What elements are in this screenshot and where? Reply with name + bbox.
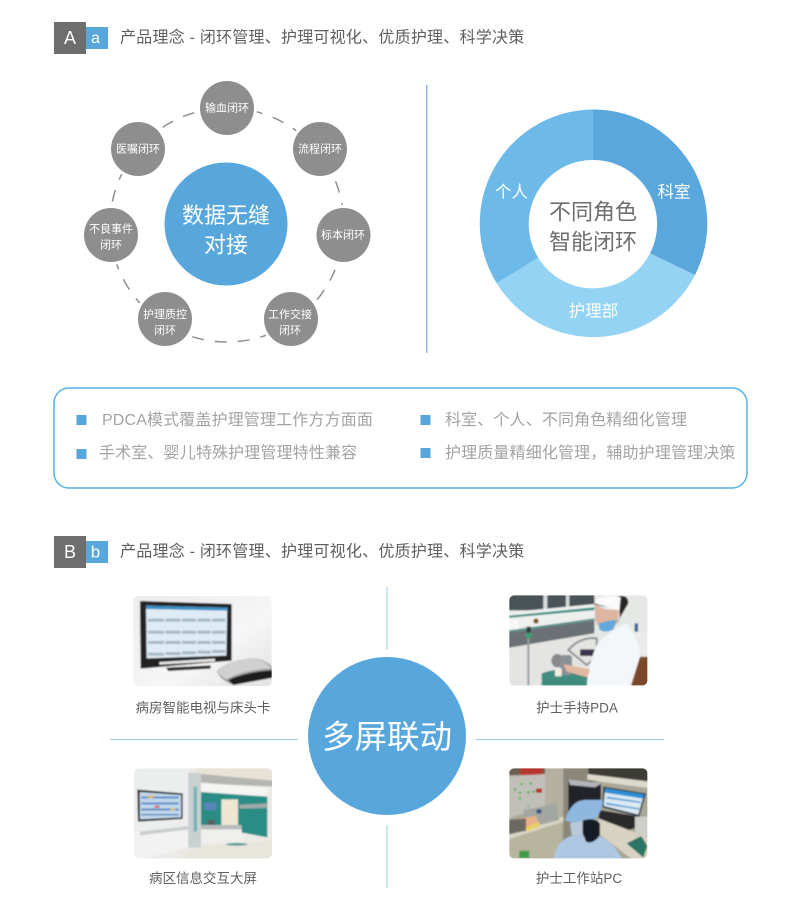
item 2: 手术室、婴儿特殊护理管理特性兼容: [99, 444, 357, 462]
node: 不良事件闭环: 不良事件: [89, 222, 133, 236]
section header B: [54, 536, 524, 568]
badge: A: a: [91, 30, 100, 47]
image: smart TV and bedside card: [134, 596, 272, 686]
node: 工作交接闭环: 闭环: [279, 324, 301, 337]
center circle: 多屏联动: 多屏联动: [322, 719, 452, 755]
caption: 护士工作站PC: 护士工作站PC: [536, 871, 622, 886]
image: ward display screen: [134, 768, 272, 858]
dashed ring: [110, 108, 344, 342]
caption: 病区信息交互大屏: 病区信息交互大屏: [149, 870, 257, 886]
image: nurse at PC workstation: [509, 768, 648, 858]
node: 流程闭环: 流程闭环: [298, 142, 342, 156]
vertical separator: [426, 85, 428, 353]
item 1: PDCA模式覆盖护理管理工作方方面面: [102, 411, 373, 429]
node: 护理质控闭环: [138, 292, 192, 346]
image: nurse with PDA: [509, 595, 648, 686]
caption: 护士手持PDA: 护士手持PDA: [536, 700, 618, 716]
node: 不良事件闭环: 闭环: [100, 238, 122, 252]
badge: A: A: [64, 28, 76, 48]
heading: section A: 产品理念 - 闭环管理、护理可视化、优质护理、科学决策: [120, 28, 524, 46]
donut center text: 不同角色: [549, 200, 637, 224]
slice: 科室: [593, 109, 707, 275]
badge: B: [54, 536, 108, 568]
node: 护理质控闭环: 护理质控: [143, 307, 187, 321]
node: 标本闭环: 标本闭环: [321, 228, 365, 242]
section header A: [54, 22, 524, 54]
label: 科室: 科室: [658, 182, 690, 202]
slice: 个人: [480, 110, 593, 283]
closed-loop cycle diagram: [84, 81, 370, 346]
center circle: 数据无缝: [182, 203, 270, 228]
slice: 护理部: [497, 253, 695, 337]
node: 医嘱闭环: 医嘱闭环: [116, 142, 160, 156]
donut center text: 智能闭环: [549, 230, 637, 254]
connector lines: [110, 587, 664, 888]
node: 流程闭环: [293, 122, 347, 176]
node: 标本闭环: [316, 208, 370, 262]
node: 工作交接闭环: 工作交接: [268, 307, 312, 321]
badge: A: [54, 22, 108, 54]
node: 输血闭环: [200, 81, 254, 135]
node: 护理质控闭环: 闭环: [154, 324, 176, 337]
node: 工作交接闭环: [264, 292, 318, 346]
caption: 病房智能电视与床头卡: 病房智能电视与床头卡: [136, 700, 270, 716]
badge: B: b: [91, 542, 100, 562]
center circle: 对接: [204, 232, 248, 258]
node: 输血闭环: 输血闭环: [205, 100, 249, 114]
panel: feature list: [54, 388, 747, 488]
donut center text: [549, 200, 637, 254]
center circle: [164, 162, 288, 286]
label: 护理部: 护理部: [569, 302, 618, 320]
center circle: 多屏联动: [308, 657, 466, 815]
item 3: 科室、个人、不同角色精细化管理: [445, 411, 687, 429]
node: 医嘱闭环: [111, 122, 165, 176]
heading: section B: 产品理念 - 闭环管理、护理可视化、优质护理、科学决策: [120, 542, 524, 560]
node: 不良事件闭环: [84, 208, 138, 262]
badge: B: B: [64, 542, 76, 562]
donut chart: [480, 109, 707, 337]
label: 个人: 个人: [495, 182, 528, 202]
item 4: 护理质量精细化管理，辅助护理管理决策: [445, 444, 736, 462]
